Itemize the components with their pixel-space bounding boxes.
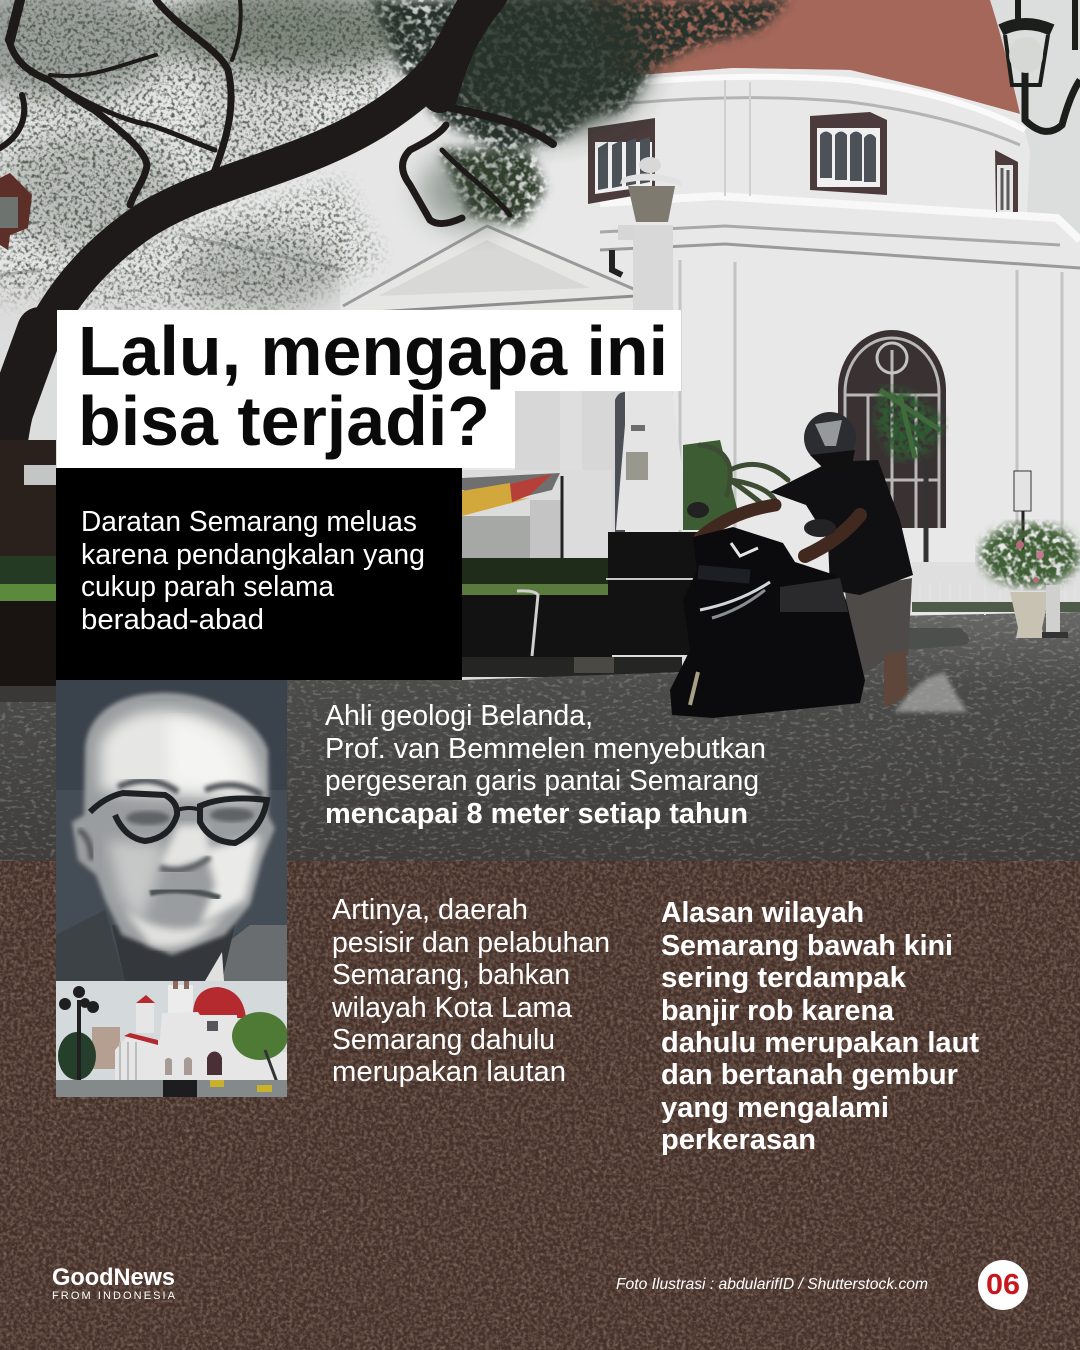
panel: black intro text: berabad-abad — [81, 604, 264, 636]
text: reason for tidal flooding: sering terdampak — [661, 962, 907, 994]
text: coastal explanation: pesisir dan pelabuhan — [332, 927, 610, 959]
signboard and planter — [912, 471, 1080, 638]
text: coastal explanation: Semarang, bahkan — [332, 959, 570, 991]
text: reason for tidal flooding — [661, 897, 979, 1156]
title — [57, 310, 681, 468]
text: van Bemmelen statement: Prof. van Bemmelen menyebutkan — [325, 733, 766, 765]
text: coastal explanation: Artinya, daerah — [332, 894, 528, 926]
text: van Bemmelen statement — [325, 700, 766, 830]
glasses — [90, 793, 267, 843]
logo: GoodNews from Indonesia: FROM INDONESIA — [52, 1290, 176, 1302]
scooter body — [670, 527, 865, 718]
background photo: flooded Kota Lama church — [0, 0, 1080, 861]
tree canopy shading — [0, 0, 650, 310]
shorts — [845, 578, 912, 675]
ear shadow — [78, 830, 92, 860]
title: bisa terjadi? — [78, 382, 490, 460]
text: van Bemmelen statement: mencapai 8 meter setiap tahun — [325, 798, 748, 830]
panel: black intro text — [56, 468, 462, 680]
leg — [884, 652, 908, 708]
logo: GoodNews from Indonesia: GoodNews — [52, 1264, 175, 1291]
church drum wall — [460, 68, 1080, 640]
panel: black intro text: karena pendangkalan yang — [81, 539, 425, 571]
awning and garden behind — [462, 470, 682, 677]
text: reason for tidal flooding: dahulu merupakan laut — [661, 1027, 979, 1059]
tree trunk and branches — [0, 0, 553, 440]
panel: black intro text: cukup parah selama — [81, 571, 335, 603]
rider and scooter — [670, 412, 968, 718]
mouth — [150, 890, 220, 898]
textured brown panel — [0, 861, 1080, 1350]
arms — [700, 505, 775, 538]
text: van Bemmelen statement: pergeseran garis pantai Semarang — [325, 765, 759, 797]
text: coastal explanation — [331, 894, 610, 1088]
text: reason for tidal flooding: Alasan wilayah — [661, 897, 864, 929]
right street lamp — [1001, 0, 1080, 131]
torso — [770, 460, 913, 595]
water — [0, 612, 1080, 861]
text: reason for tidal flooding: perkerasan — [661, 1124, 816, 1156]
head — [72, 693, 275, 955]
palms — [683, 384, 948, 562]
pale building behind tree — [0, 75, 345, 330]
photo credit: Foto Ilustrasi : abdularifID / Shutterstock.com — [616, 1276, 928, 1293]
dome — [590, 0, 1020, 114]
jacket — [56, 910, 125, 981]
forehead and hair highlight — [100, 710, 259, 800]
text: coastal explanation: Semarang dahulu — [332, 1024, 555, 1056]
windows — [588, 112, 1018, 528]
cheeks — [200, 835, 260, 925]
text: reason for tidal flooding: dan bertanah gembur — [661, 1059, 958, 1091]
nose — [160, 825, 212, 868]
portrait: Prof. van Bemmelen — [56, 680, 287, 981]
text: reason for tidal flooding: yang mengalami — [661, 1092, 889, 1124]
helmet — [804, 412, 856, 457]
shirt — [205, 952, 224, 981]
page number — [978, 1260, 1028, 1310]
pediment — [342, 224, 633, 532]
text: reason for tidal flooding: banjir rob karena — [661, 995, 895, 1027]
text: reason for tidal flooding: Semarang bawah kini — [661, 930, 953, 962]
photo: Blenduk church thumbnail — [56, 981, 288, 1097]
lamp post — [606, 157, 698, 655]
tree foliage — [370, 0, 790, 225]
eyebrows — [118, 781, 262, 795]
text: van Bemmelen statement: Ahli geologi Belanda, — [325, 700, 593, 732]
hedge and plants left — [0, 440, 56, 702]
panel: black intro text: Daratan Semarang meluas — [81, 506, 417, 538]
text: coastal explanation: merupakan lautan — [332, 1056, 566, 1088]
splash — [895, 673, 968, 712]
text: coastal explanation: wilayah Kota Lama — [331, 992, 573, 1024]
title: Lalu, mengapa ini — [78, 312, 668, 390]
left lantern — [0, 173, 32, 250]
page number: 06 — [986, 1269, 1020, 1301]
